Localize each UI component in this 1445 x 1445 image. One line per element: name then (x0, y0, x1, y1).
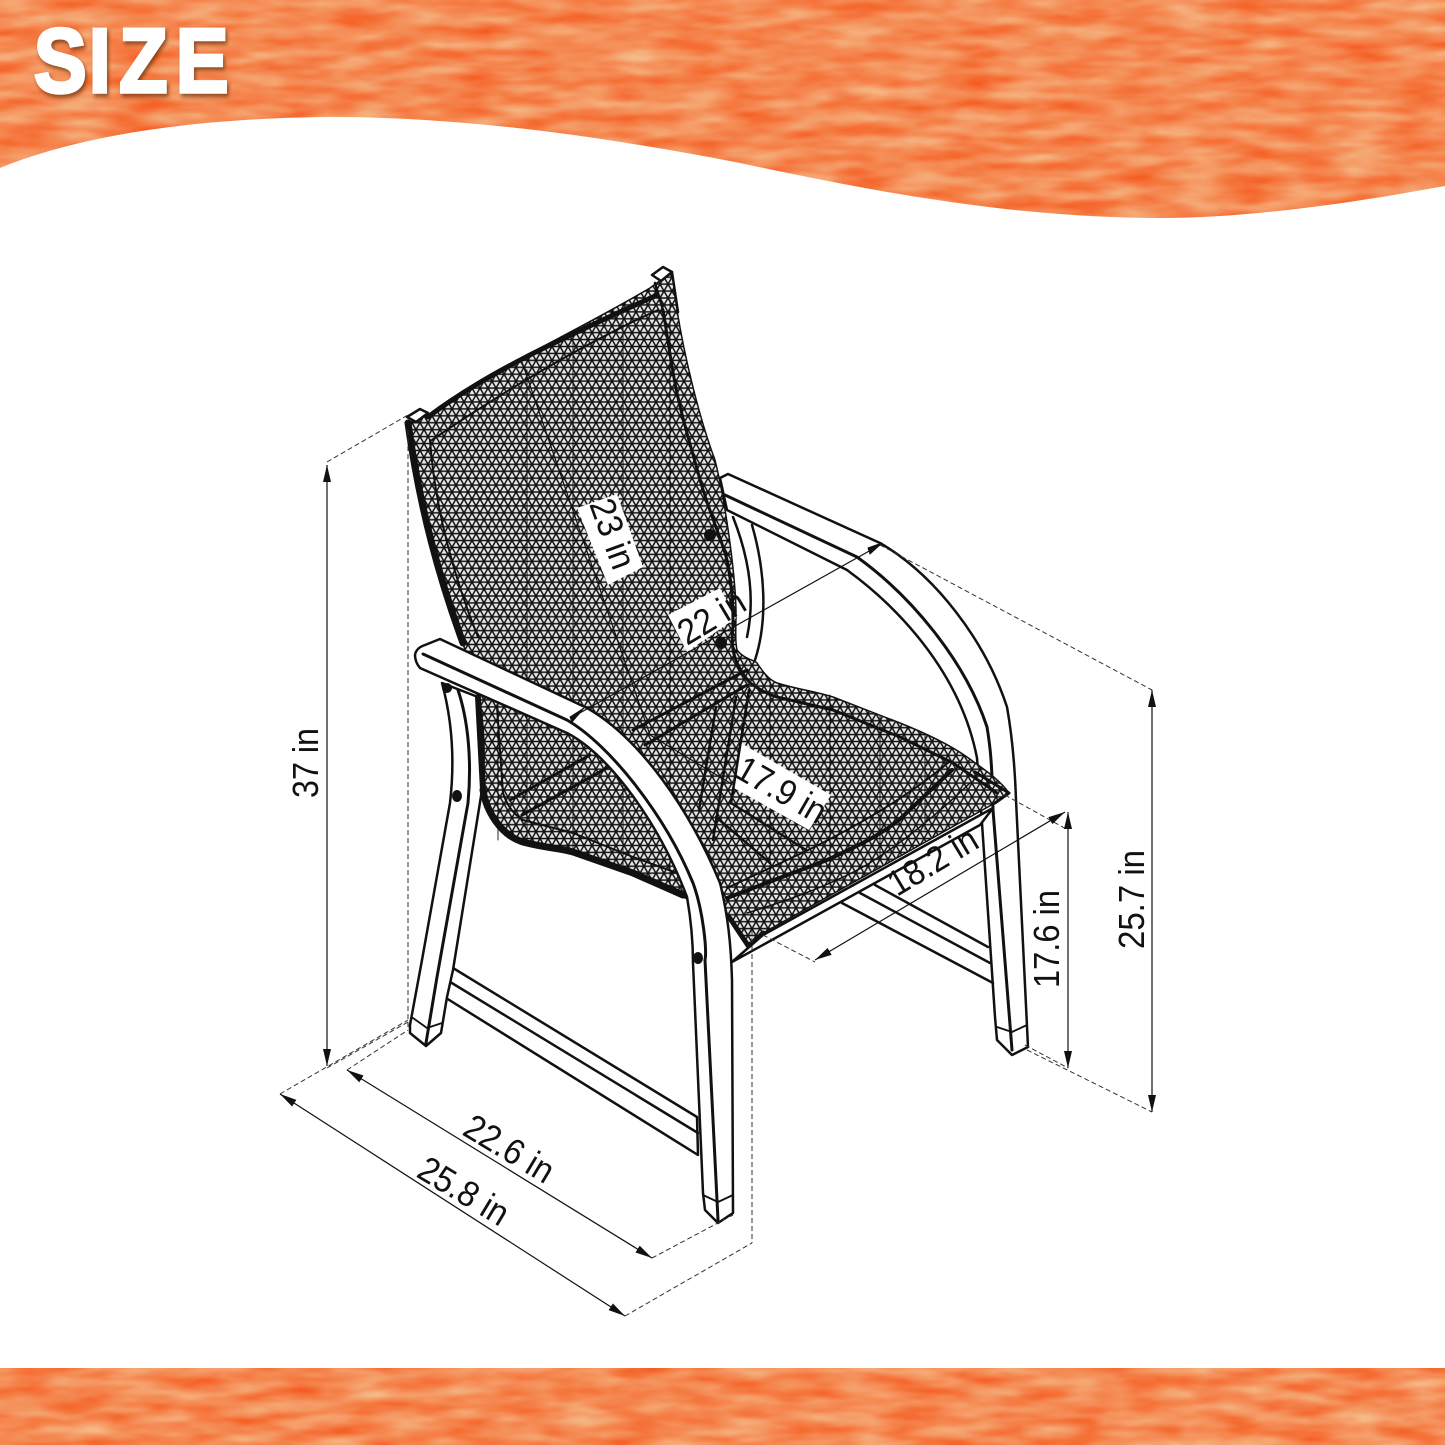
front seat rail (732, 808, 993, 962)
label: 17.9 in: 17.9 in (729, 747, 834, 832)
inner dimension lines (522, 362, 880, 828)
label: 25.7 in: 25.7 in (1111, 850, 1152, 949)
label: 23 in: 23 in (581, 493, 645, 574)
bolt (693, 952, 703, 964)
back mesh bolts (704, 529, 727, 649)
label: 22 in: 22 in (670, 581, 753, 653)
label: 22.6 in: 22.6 in (457, 1106, 562, 1191)
front stretcher (438, 968, 698, 1155)
right arm and front leg (720, 474, 1028, 1055)
label: 17.9 in (729, 690, 834, 832)
label: 17.6 in: 17.6 in (1026, 890, 1067, 988)
label: 25.8 in: 25.8 in (411, 1148, 517, 1234)
top orange wave banner (0, 0, 1445, 225)
dimension arrows (280, 465, 1152, 1316)
bottom orange band (0, 1368, 1445, 1445)
dashed extension lines (280, 415, 1152, 1316)
bolt (452, 790, 462, 802)
label: 37 in: 37 in (285, 728, 326, 798)
back top post caps (407, 267, 678, 422)
bolt under left arm (442, 683, 452, 693)
mesh back and seat (408, 272, 1009, 947)
left rear leg (410, 683, 483, 1046)
right stretcher (842, 885, 993, 983)
title: SIZE (34, 11, 229, 112)
chair drawing (407, 267, 1028, 1223)
label: 18.2 in: 18.2 in (880, 818, 985, 904)
right rear stile (733, 517, 763, 660)
mesh hems and seams (408, 295, 1009, 947)
left arm and front leg (415, 639, 733, 1223)
